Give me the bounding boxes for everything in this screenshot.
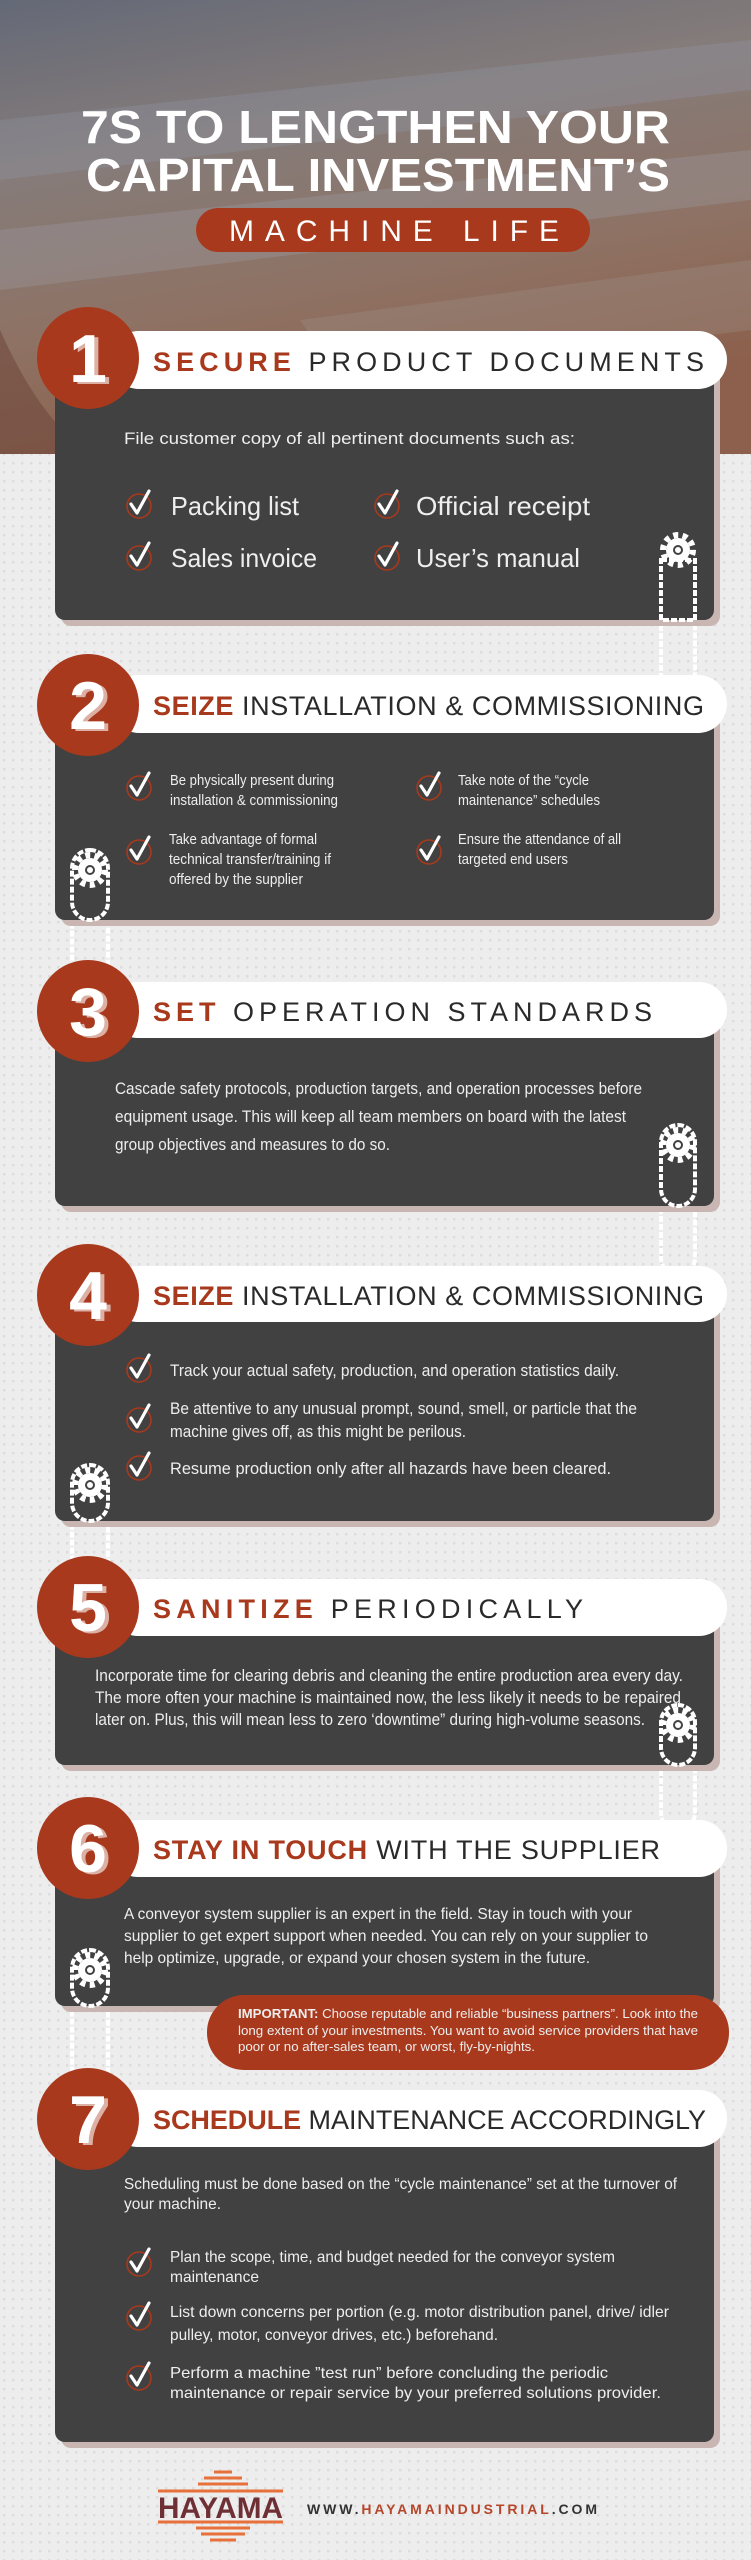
number 7: 7 [73,2084,111,2160]
checklist 1: Official receipt [416,491,591,521]
header 6: STAY IN TOUCH WITH THE SUPPLIER [153,1835,662,1865]
belt: 1 to 2 [661,530,695,690]
number 6: 6 [73,1813,111,1889]
header 7 [110,2090,727,2147]
header 2 [110,675,727,733]
checklist 4: Be attentive to any unusual prompt, sound, smell, or particle that the [170,1399,637,1418]
checklist 7: Perform a machine ”test run” before concluding the periodic [170,2365,608,2382]
callout: important: long extent of your investments. You want to avoid service providers that have [238,2024,698,2038]
belt: 5 to 6 [661,1705,695,1830]
number 7: 7 [69,2082,107,2158]
checklist 1 [127,491,591,573]
number 3: 3 [69,974,107,1050]
checklist 2: targeted end users [458,851,568,868]
header 5: SANITIZE PERIODICALLY [153,1594,585,1624]
number 6 [37,1797,139,1899]
checklist 2: Be physically present during [170,772,334,789]
panel: section 2 [37,654,727,926]
title pill: machine life [196,208,590,252]
panel: section 3 [37,960,727,1212]
checklist 2: Ensure the attendance of all [458,831,621,848]
callout: important: poor or no after-sales team, or worst, fly-by-nights. [238,2040,535,2054]
checklist 7: Plan the scope, time, and budget needed for the conveyor system [170,2249,615,2266]
callout: important: IMPORTANT: Choose reputable and reliable “business partners”. Look into the [238,2007,698,2021]
number 4 [37,1244,139,1346]
checklist 2 [127,772,621,888]
number 1: 1 [69,321,107,397]
checklist 2: offered by the supplier [169,871,303,888]
checklist 1: User’s manual [416,543,580,573]
logo: hayama: HAYAMA [158,2492,283,2525]
checklist 2: Take advantage of formal [169,831,317,848]
checklist 4: Resume production only after all hazards have been cleared. [170,1459,611,1478]
text 6: help optimize, upgrade, or expand your chosen system in the future. [124,1950,590,1967]
panel: section 7 [37,2068,727,2448]
number 1 [37,307,139,409]
checklist 2: Take note of the “cycle [458,772,589,789]
belt: 3 to 4 [661,1125,695,1275]
number 5: 5 [73,1572,111,1648]
text 3: equipment usage. This will keep all team members on board with the latest [115,1107,626,1126]
text 3: Cascade safety protocols, production targets, and operation processes before [115,1079,642,1098]
number 5: 5 [69,1570,107,1646]
belt: 4 to 5 [72,1465,108,1590]
number 1: 1 [73,323,111,399]
panel: section 6 [37,1797,727,2012]
callout: important [207,1995,729,2070]
text 6: supplier to get expert support when needed. You can rely on your supplier to [124,1928,648,1945]
text 6: A conveyor system supplier is an expert in the field. Stay in touch with your [124,1906,633,1923]
number 3: 3 [73,976,111,1052]
header photo [0,0,751,454]
number 7 [37,2068,139,2170]
checklist 7: List down concerns per portion (e.g. motor distribution panel, drive/ idler [170,2304,670,2321]
title pill: machine life: MACHINE LIFE [229,215,559,248]
checklist 4 [127,1355,637,1480]
header 3 [110,982,727,1038]
title [81,101,670,252]
number 6: 6 [69,1811,107,1887]
text 5: later on. Plus, this will mean less to zero ‘downtime” during high-volume seasons. [95,1710,645,1729]
belt: 6 to 7 [72,1950,108,2100]
number 2: 2 [73,670,111,746]
number 4: 4 [73,1260,111,1336]
checklist 4: Track your actual safety, production, and operation statistics daily. [170,1361,619,1380]
text 7 [124,2176,678,2213]
title: CAPITAL INVESTMENT’S [86,149,670,201]
checklist 7 [127,2249,670,2402]
number 3 [37,960,139,1062]
text 6 [124,1906,648,1967]
text 1: File customer copy of all pertinent documents such as: [124,429,575,448]
text 5: The more often your machine is maintained now, the less likely it needs to be repaired [95,1688,681,1707]
header 1 [110,331,727,389]
header 4: SEIZE INSTALLATION & COMMISSIONING [153,1281,706,1311]
number 2: 2 [69,668,107,744]
text 3: group objectives and measures to do so. [115,1135,390,1154]
panel: section 1 [37,307,727,626]
checklist 1: Packing list [171,491,300,521]
belt: 2 to 3 [72,850,108,990]
header 7: SCHEDULE MAINTENANCE ACCORDINGLY [153,2105,708,2135]
checklist 1: Sales invoice [171,543,317,573]
text 5 [95,1666,683,1729]
panel: section 5 [37,1556,727,1771]
checklist 7: pulley, motor, conveyor drives, etc.) beforehand. [170,2327,498,2344]
text 7: Scheduling must be done based on the “cycle maintenance” set at the turnover of [124,2176,678,2193]
number 2 [37,654,139,756]
checklist 2: maintenance” schedules [458,792,600,809]
checklist 7: maintenance or repair service by your preferred solutions provider. [170,2385,661,2402]
header 5 [110,1579,727,1636]
checklist 2: technical transfer/training if [169,851,332,868]
header 6 [110,1820,727,1877]
header 2: SEIZE INSTALLATION & COMMISSIONING [153,691,706,721]
title: 7S TO LENGTHEN YOUR [81,101,670,153]
checklist 4: machine gives off, as this might be perilous. [170,1422,466,1441]
website url: WWW.HAYAMAINDUSTRIAL.COM [307,2501,597,2517]
header 1: SECURE PRODUCT DOCUMENTS [153,347,706,377]
number 5 [37,1556,139,1658]
number 4: 4 [69,1258,107,1334]
checklist 7: maintenance [170,2269,259,2286]
text 5: Incorporate time for clearing debris and cleaning the entire production area every day. [95,1666,683,1685]
text 7: your machine. [124,2196,221,2213]
checklist 2: installation & commissioning [170,792,338,809]
header 3: SET OPERATION STANDARDS [153,997,654,1027]
logo: hayama [158,2472,283,2540]
header 4 [110,1266,727,1322]
text 3 [115,1079,642,1154]
panel: section 4 [37,1244,727,1527]
